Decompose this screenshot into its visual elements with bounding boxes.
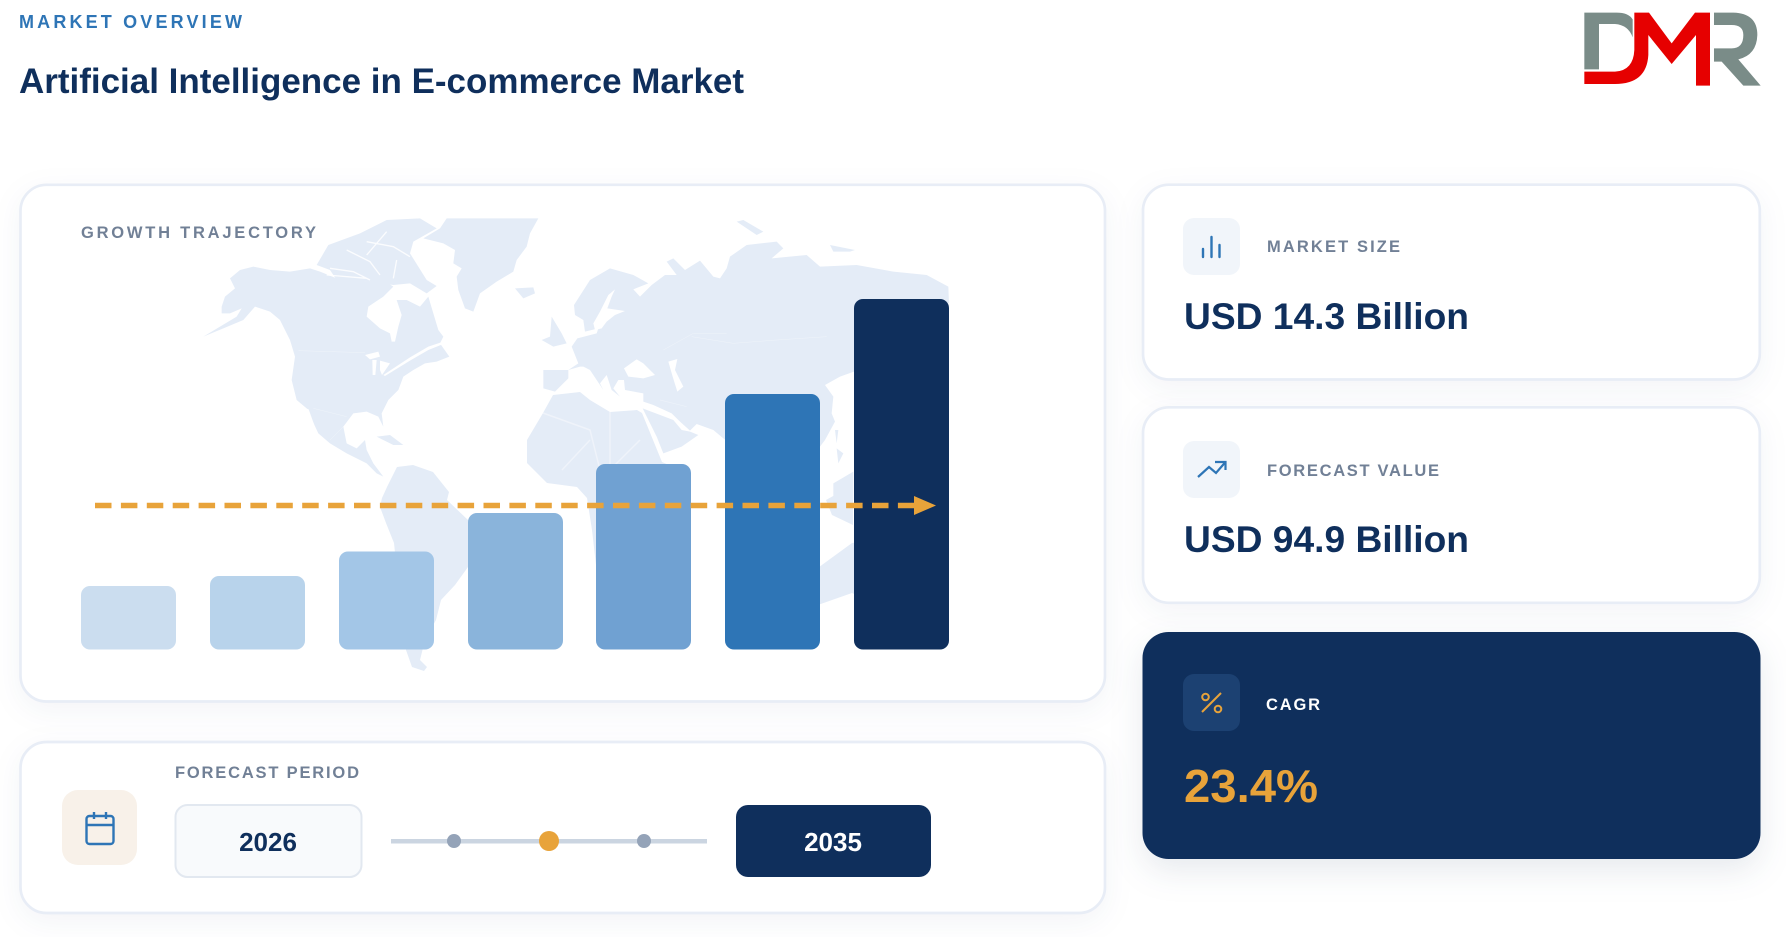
icon: percent	[1183, 674, 1240, 731]
value: CAGR: 23.4%	[1184, 760, 1318, 812]
icon: bar chart	[1183, 218, 1240, 275]
end year 2035	[736, 805, 931, 877]
icon: trend arrow	[1183, 441, 1240, 498]
panel: forecast value	[1143, 407, 1760, 603]
bar chart	[81, 299, 949, 650]
value: market size: USD 14.3 Billion	[1184, 296, 1469, 337]
label: CAGR: CAGR	[1266, 696, 1320, 714]
panel: CAGR	[1142, 632, 1760, 859]
icon: calendar	[62, 790, 137, 865]
Australia	[820, 542, 854, 604]
panel: forecast period	[20, 742, 1105, 913]
panel: market size	[1143, 185, 1760, 380]
world map background	[203, 218, 950, 671]
start year 2026	[176, 805, 362, 877]
label: forecast period: FORECAST PERIOD	[175, 764, 359, 782]
logo: DMR	[1584, 13, 1761, 86]
South America	[380, 465, 468, 671]
label: market size: MARKET SIZE	[1267, 238, 1400, 256]
arrow: growth trend	[95, 496, 936, 515]
panel: growth trajectory	[20, 185, 1105, 702]
label: forecast value: FORECAST VALUE	[1267, 462, 1439, 480]
title: Artificial Intelligence in E-commerce Market	[19, 62, 744, 101]
value: forecast value: USD 94.9 Billion	[1184, 519, 1469, 560]
Africa	[527, 392, 666, 564]
end year 2035: 2035	[804, 827, 862, 857]
start year 2026: 2026	[239, 827, 297, 857]
timeline	[391, 831, 707, 851]
eyebrow: market overview: MARKET OVERVIEW	[19, 12, 242, 32]
label: growth trajectory: GROWTH TRAJECTORY	[81, 224, 316, 242]
